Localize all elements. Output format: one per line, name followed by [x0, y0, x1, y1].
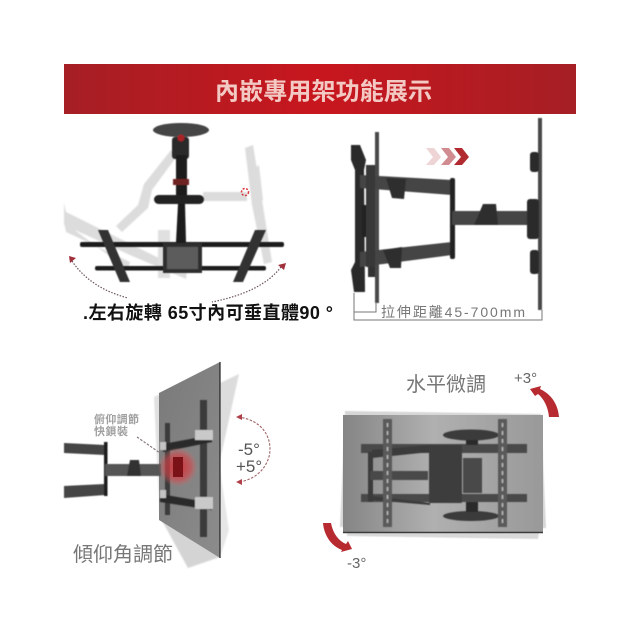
tilt values: -5° — [238, 440, 260, 459]
ghost mount positions — [64, 145, 272, 279]
arm and bracket — [64, 400, 213, 537]
panel: left-right rotation — [64, 123, 333, 323]
panel: horizontal fine adjustment — [323, 370, 559, 572]
dotted rotation arrows — [72, 261, 281, 302]
plus label: +3° — [514, 370, 537, 387]
tilt arc — [238, 417, 270, 482]
panel: tilt adjustment: 快鎖裝 — [94, 424, 128, 438]
heading: 水平微調 — [406, 373, 486, 396]
caption: .左右旋轉 65寸內可垂直體90 ° — [83, 302, 333, 323]
dimension label — [380, 304, 526, 319]
panel: tilt adjustment: +5° — [236, 457, 262, 476]
title banner — [64, 64, 576, 114]
ghost screens — [340, 411, 546, 528]
minus label: -3° — [347, 555, 366, 572]
title banner: 內嵌專用架功能展示 — [215, 78, 432, 106]
caption: 傾仰角調節 — [73, 543, 173, 566]
quick-lock label: 俯仰調節 — [94, 412, 139, 426]
plus arrow — [530, 386, 559, 417]
mount rear view — [361, 419, 527, 527]
panel: extension distance — [351, 118, 542, 320]
arm and wall plate — [80, 123, 284, 282]
articulated arm — [351, 118, 542, 310]
minus arrow — [323, 523, 352, 552]
screen — [343, 415, 543, 533]
panel: extension distance: 拉伸距離45-700mm — [381, 304, 525, 320]
ghost screens — [154, 374, 239, 568]
pointer line — [137, 437, 160, 453]
red highlight — [158, 447, 198, 487]
panel: tilt adjustment — [64, 362, 270, 568]
tilted screen — [159, 362, 220, 558]
chevrons — [426, 148, 469, 165]
rotation marker — [242, 188, 248, 196]
dimension lines — [354, 293, 542, 320]
